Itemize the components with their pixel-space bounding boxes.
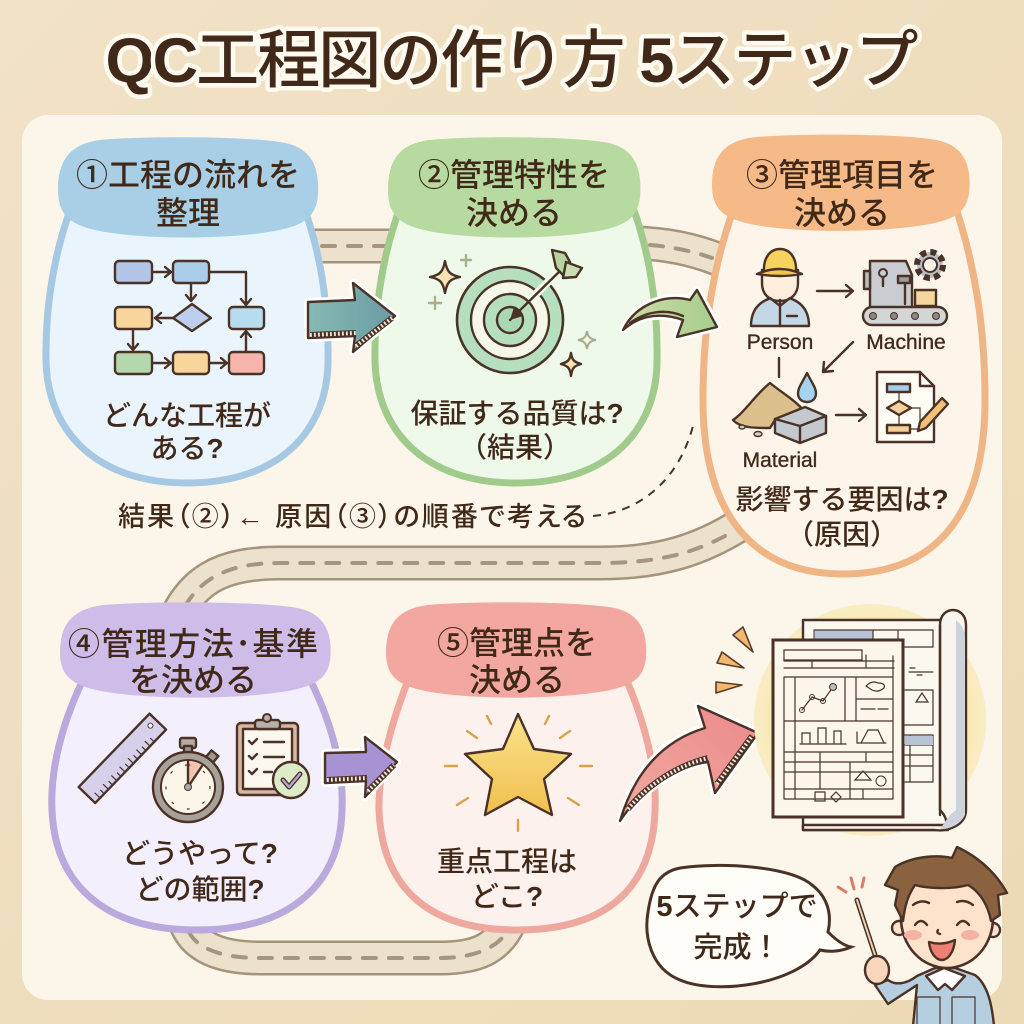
question line 2: ある? [150,433,224,464]
heading: ①工程の流れを [76,157,300,193]
note text: 結果（②）← 原因（③）の順番で考える [118,502,586,532]
ears [892,921,1000,937]
card body [703,205,985,574]
glow behind chart [754,604,986,836]
icon: method document [877,372,948,442]
card header [58,137,318,238]
panel: step 1 [46,137,328,483]
icon: person [751,249,809,326]
arrow: step 2 to 3 [623,290,717,337]
icon: stopwatch [153,738,223,822]
panel: step 3 [703,135,985,574]
dashed leader [593,422,694,516]
label: Person: Person [747,331,813,354]
arrow: step 5 to result [620,706,758,821]
accent marks [716,627,753,693]
icon: ruler [79,714,166,803]
panel: step 2 [375,137,657,483]
card body [46,205,328,483]
heading: ④管理方法･基準 [68,626,318,662]
heading line 2: 決める [794,195,890,231]
card body [379,670,655,930]
character: instructor [838,847,1007,1024]
bar chart [800,728,846,744]
card body [375,205,657,483]
arrow: step 4 to 5 [325,737,397,797]
panel: step 4 [52,602,342,930]
card header [386,602,646,698]
body [875,968,994,1024]
panel: step 5 [379,602,655,930]
road segments [170,243,740,958]
question: 重点工程は [437,846,577,877]
heading line 2: を決める [129,662,257,698]
bubble outline [647,865,851,987]
card header [712,135,970,231]
arrow: material to method [836,409,866,421]
pockets [917,997,975,1024]
icon: star [445,714,592,831]
sparkle ticks [838,878,864,892]
heading: ②管理特性を [418,157,610,193]
line chart [802,687,833,710]
pointer stick [857,900,876,958]
bubble text line 2: 完成！ [693,931,781,964]
card header [60,602,331,698]
icon: machine [863,252,947,325]
icon: target [429,250,596,376]
hair [885,847,1007,921]
question line 2: （原因） [786,519,898,550]
question line 2: （結果） [459,432,571,463]
heading line 2: 決める [466,195,562,231]
question line 2: どの範囲? [135,874,265,905]
icon: flowchart [115,261,264,374]
heading line 2: 整理 [156,195,220,231]
front sheet [773,640,903,817]
label: Material: Material [743,449,817,472]
arrow: step 1 to 2 [308,283,395,352]
icon: clipboard [237,714,309,798]
heading: ③管理項目を [746,157,938,193]
card header [388,137,640,238]
collar [926,968,965,990]
arrow: person to machine [817,285,853,297]
icon: material [733,373,826,443]
question: 保証する品質は? [410,398,624,429]
eyes and mouth [913,901,973,934]
label: Machine: Machine [866,331,946,354]
result: QC process chart [754,604,986,836]
heading: ⑤管理点を [437,625,597,661]
heading line 2: 決める [469,662,565,698]
bubble text: 5ステップで [656,890,818,923]
question: 影響する要因は? [735,484,949,515]
question: どうやって? [122,838,278,869]
back sheet [803,620,948,830]
arrow: machine to material [779,342,853,377]
scroll roll [803,610,966,830]
card body [52,670,342,930]
hand [865,956,889,984]
pointer stick highlight [857,900,876,958]
cheeks [904,930,979,940]
face [901,868,993,968]
note: order of thinking [118,422,694,532]
question line 2: どこ? [471,881,543,912]
speech bubble [647,865,851,987]
title: QC工程図の作り方 5ステップ [106,26,918,96]
mouth [929,940,955,960]
question: どんな工程が [103,400,271,431]
